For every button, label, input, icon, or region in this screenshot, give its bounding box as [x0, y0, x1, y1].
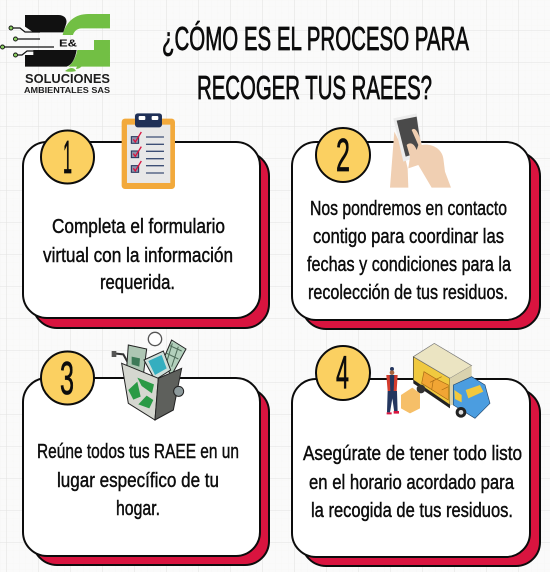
step 3 text: Reúne todos tus RAEE en un — [37, 441, 239, 463]
step 2 number — [316, 128, 370, 182]
step 1 text: virtual con la información — [43, 245, 233, 267]
logo: E&G Soluciones Ambientales SAS — [0, 14, 110, 95]
step 3 text: lugar específico de tu — [57, 470, 219, 492]
icon: hand holding phone — [390, 113, 451, 188]
step 1 text: requerida. — [100, 272, 175, 294]
logo: E&G Soluciones Ambientales SAS: AMBIENTALES SAS — [24, 85, 110, 95]
icon: delivery truck, worker and boxes — [386, 343, 490, 418]
step 2 number: 2 — [336, 129, 350, 181]
step 3 text — [37, 441, 239, 520]
step 1 number — [41, 130, 94, 184]
logo: E&G Soluciones Ambientales SAS: SOLUCIONES — [25, 72, 110, 86]
step 3 number — [41, 352, 94, 404]
icon: clipboard checklist — [122, 113, 175, 189]
step 1 text — [43, 216, 233, 294]
step 3 text: hogar. — [116, 498, 160, 520]
panel: step 2 — [292, 113, 540, 329]
panel: step 4 — [292, 343, 540, 566]
step 4 text: en el horario acordado para — [309, 472, 515, 494]
panel: step 3 — [23, 332, 269, 565]
step 4 text: la recogida de tus residuos. — [311, 500, 513, 522]
step 4 text — [303, 443, 522, 522]
step 1 text: Completa el formulario — [52, 216, 225, 238]
panel: step 1 — [23, 113, 269, 328]
step 2 text: contigo para coordinar las — [313, 226, 504, 248]
step 4 number: 4 — [336, 346, 349, 398]
step 4 number — [316, 346, 370, 400]
logo: E&G Soluciones Ambientales SAS: E& — [59, 38, 77, 50]
step 3 number: 3 — [60, 352, 74, 404]
icon: recycling bin with electronics — [112, 332, 186, 420]
step 2 text — [307, 198, 512, 304]
title — [162, 20, 469, 106]
step 1 number: 1 — [63, 131, 72, 183]
step 2 text: recolección de tus residuos. — [308, 282, 508, 304]
